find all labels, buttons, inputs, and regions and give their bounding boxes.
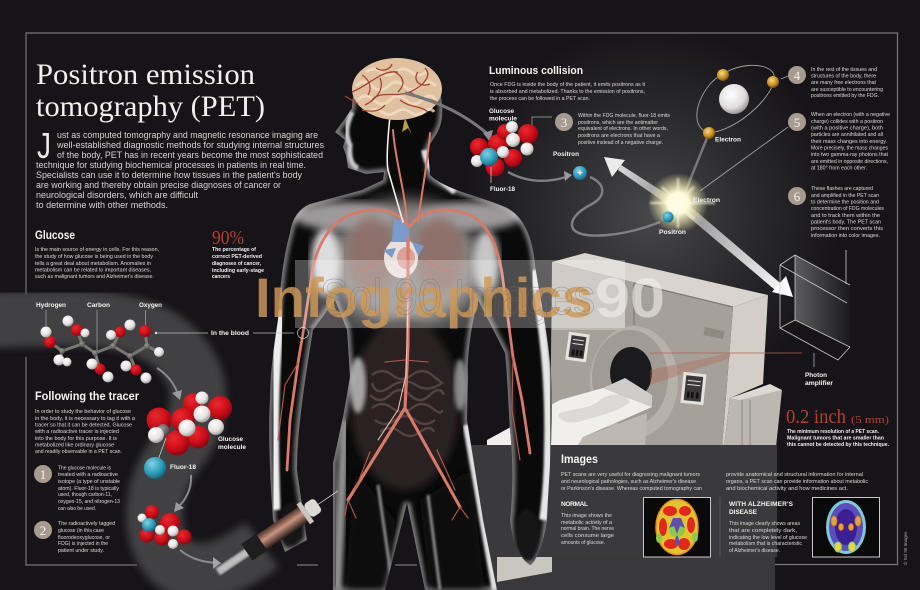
stat: resolution <box>786 406 889 448</box>
step 6: patient's body. The PET scan <box>811 220 881 226</box>
step 5: their mass changes into energy. <box>811 139 887 145</box>
arm highlights <box>274 310 281 510</box>
intro text with drop cap <box>36 125 324 211</box>
luminous collision section: Luminous collision <box>489 65 583 77</box>
step 4: In the rest of the tissues and <box>811 67 877 73</box>
following the tracer section: into the body for this purpose. It is <box>35 436 117 442</box>
step 1: atom). Fluor-18 is typically <box>58 486 119 492</box>
following the tracer section: and readily observable in a PET scan. <box>35 449 122 455</box>
stat: resolution: Malignant tumors that are smaller than <box>787 436 885 442</box>
label: glucose molecule upper: Glucose <box>489 108 515 115</box>
step 3: Within the FDG molecule, fluor-18 emits <box>578 113 670 119</box>
step 3: positive instead of a negative charge. <box>578 140 663 146</box>
background glow behind collision diagram <box>440 34 897 414</box>
luminous collision section: Once FDG is inside the body of the patient, it emits positrons as it <box>490 82 645 88</box>
orbit atom: Electron <box>715 136 741 144</box>
normal brain caption <box>561 501 614 546</box>
step 6: information into color images. <box>811 233 880 239</box>
intro text with drop cap: are working and thereby obtain precise diagnoses of cancer or <box>36 180 282 191</box>
abdomen dark region <box>351 320 459 490</box>
step 6: and to track them within the <box>811 213 880 219</box>
stat: 90 percent: cancers <box>212 274 230 280</box>
title <box>36 58 265 123</box>
label: in the blood <box>155 328 308 338</box>
brainstem marker <box>402 118 412 135</box>
step 2: patient under study. <box>58 548 104 554</box>
control panel right <box>680 372 707 405</box>
step 5 <box>788 112 890 172</box>
gantry ring <box>590 326 730 438</box>
step 4: are many free electrons that <box>811 80 876 86</box>
step 5: 5 <box>794 115 800 130</box>
alzheimer's caption: that are completely dark, <box>729 528 798 534</box>
following the tracer section: with a radioactive tracer is injected <box>34 429 119 435</box>
glucose section <box>35 230 159 280</box>
step 4: structures of the body, there <box>811 74 876 80</box>
arrow: fluor-18 to tagged molecule <box>174 475 191 512</box>
step 1: can also be used. <box>58 506 96 512</box>
step 5: are emitted in opposite directions, <box>811 159 888 165</box>
neck highlight <box>424 150 455 192</box>
alzheimer's caption: metabolism that is characteristic <box>729 541 802 547</box>
arteries <box>278 100 530 520</box>
step 6: to determine the position and <box>811 200 879 206</box>
positron and path: + <box>577 168 583 178</box>
scanner side cabinet <box>724 384 782 447</box>
intro text with drop cap: to determine with other methods. <box>36 200 168 211</box>
step 3: equivalent of electrons. In other words, <box>578 126 668 132</box>
following the tracer section: metabolized like ordinary glucose <box>35 442 114 448</box>
stat: 90 percent: 90% <box>212 227 244 249</box>
alzheimer's brain scan image <box>812 498 880 557</box>
luminous collision section <box>489 65 645 102</box>
photon amplifier box <box>650 250 850 387</box>
step 5: at 180° from each other. <box>811 166 867 172</box>
brain <box>345 58 442 135</box>
scanner side face <box>722 295 768 447</box>
step 1: oxygen-15, and nitrogen-13 <box>58 499 120 505</box>
stat: 90 percent <box>212 227 264 280</box>
images section text <box>561 452 868 492</box>
glucose section: Is the main source of energy in cells. For this reason, <box>35 247 159 253</box>
images section text: organs, a PET scan can provide information about metabolic <box>726 479 868 485</box>
scanner base highlight <box>497 555 552 582</box>
stat: resolution: (5 mm) <box>851 414 889 426</box>
normal brain caption: This image shows the <box>561 513 612 519</box>
normal brain scan image <box>644 498 710 557</box>
control panel left <box>565 332 590 362</box>
divider between brain scans <box>720 497 721 557</box>
step 1 <box>34 465 120 512</box>
molecule atom labels <box>36 302 162 309</box>
intro text with drop cap: J <box>37 125 51 166</box>
label: glucose molecule: molecule <box>218 444 247 451</box>
following the tracer section: In order to study the behavior of glucose <box>35 409 131 415</box>
following the tracer section: Following the tracer <box>35 391 139 403</box>
intro text with drop cap: well-established diagnostic methods for studying internal structures <box>56 140 324 151</box>
scanner top face <box>552 253 768 307</box>
fluor-18 atom: Fluor-18 <box>170 464 197 471</box>
step 2: fluorodeoxyglucose, or <box>58 535 110 541</box>
PET scanner <box>470 253 782 590</box>
tagged molecule <box>138 505 192 549</box>
following the tracer section: in the body, it is necessary to tag it with a <box>35 416 135 422</box>
luminous collision section: the process can be followed in a PET scan. <box>490 96 590 102</box>
step 5: charge) collides with a positron <box>811 119 883 125</box>
step 1: The glucose molecule is <box>58 466 111 472</box>
fdg molecule upper: Fluor-18 <box>490 186 516 193</box>
watermark: Sol 90 Images <box>320 269 595 325</box>
glucose section: Glucose <box>35 230 75 242</box>
step 6: 6 <box>794 189 801 204</box>
step 2 <box>34 521 115 554</box>
molecule atom labels: Carbon <box>87 302 110 309</box>
flash collision: Positron <box>659 229 686 236</box>
molecule atom labels: Oxygen <box>139 302 162 309</box>
scanner door line <box>634 283 733 325</box>
images section text: Images <box>561 452 598 466</box>
step 5: (with a positive charge), both <box>811 126 883 132</box>
arrow: chain to glucose molecule <box>157 368 182 400</box>
images section text: and neurological pathologies, such as Alzheimer's disease <box>561 479 696 485</box>
label: glucose molecule <box>218 436 247 451</box>
heart <box>383 219 424 278</box>
arrow: tagged molecule to syringe <box>180 550 221 569</box>
arrow: brain to molecule <box>405 93 493 142</box>
watermark: Infographics <box>255 266 593 329</box>
following the tracer section <box>34 391 139 455</box>
flash collision <box>648 173 720 236</box>
flash collision: Electron <box>693 197 720 204</box>
luminous collision section: is absorbed and metabolized. Thanks to the emission of positrons, <box>490 89 645 95</box>
step 6: These flashes are captured <box>811 186 873 192</box>
step 2: The radioactively tagged <box>58 521 115 527</box>
step 1: treated with a radioactive <box>58 472 118 478</box>
step 4: positrons emitted by the FDG. <box>811 93 879 99</box>
stat: resolution: 0.2 inch <box>786 406 846 428</box>
label: glucose molecule: Glucose <box>218 436 244 443</box>
title: Positron emission <box>36 58 255 91</box>
stat: resolution: The minimum resolution of a PET scan. <box>787 429 879 435</box>
stat: 90 percent: correct PET-derived <box>212 254 263 260</box>
step 1: isotope (a type of unstable <box>58 479 120 485</box>
intestines <box>370 371 444 436</box>
copyright note: © Sol 90 Images <box>902 531 908 565</box>
label: glucose molecule upper: molecule <box>489 116 518 122</box>
step 5: particles are annihilated and all <box>811 132 883 138</box>
images section text: or Parkinson's disease. Whereas computed tomography can <box>561 486 702 492</box>
stat: 90 percent: diagnoses of cancer, <box>212 261 261 267</box>
dark legs <box>345 470 485 590</box>
stat: 90 percent: The percentage of <box>212 247 256 253</box>
label: glucose molecule upper <box>489 108 518 122</box>
alzheimer's caption: indicating the low level of glucose <box>729 535 807 541</box>
step 3: positrons, which are the antimatter <box>578 120 658 126</box>
stat: resolution: this cannot be detected by this technique. <box>787 442 889 448</box>
glucose section: such as malignant tumors and Alzheimer's disease. <box>35 274 154 280</box>
fluor-18 atom <box>144 438 197 479</box>
large arrow from flash <box>604 157 676 206</box>
photon beam arrow <box>678 200 793 297</box>
step 1: used, though carbon-11, <box>58 492 112 498</box>
intro text with drop cap: of the body, PET has in recent years become the most sophisticated <box>57 150 323 161</box>
positron and path <box>508 151 660 236</box>
step 6: and amplified in the PET scan <box>811 193 879 199</box>
step 1: 1 <box>40 467 46 482</box>
step 3 <box>555 113 670 146</box>
intro text with drop cap: neurological disorders, which are difficult <box>36 190 198 201</box>
step 5: into two gamma-ray photons that <box>811 152 888 158</box>
syringe <box>211 481 345 582</box>
step 3: 3 <box>561 115 567 130</box>
leg highlights <box>466 425 495 590</box>
images section text: provide anatomical and structural information for internal <box>726 472 863 478</box>
step 2: FDG) is injected in the <box>58 541 108 547</box>
step 6 <box>788 186 884 239</box>
chest shading <box>329 200 481 324</box>
tracer path band <box>0 318 262 572</box>
scanner front face <box>550 262 733 447</box>
images section text: and biochemical activity and how medicines act. <box>726 486 848 492</box>
step 4: 4 <box>794 68 801 83</box>
lungs <box>347 217 464 293</box>
step 4: are susceptible to encountering <box>811 87 883 93</box>
following the tracer section: tracer so that it can be detected. Glucose <box>35 422 132 428</box>
normal brain caption: NORMAL <box>561 501 588 508</box>
label: in the blood: In the blood <box>211 330 249 337</box>
intro text with drop cap: ust as computed tomography and magnetic resonance imaging are <box>57 130 318 141</box>
step 2: glucose (in this case <box>58 528 104 534</box>
normal brain caption: normal brain. The nerve <box>561 526 614 532</box>
normal brain caption: amounts of glucose. <box>561 540 605 546</box>
step 2: 2 <box>40 523 46 538</box>
alzheimer's caption: WITH ALZHEIMER'S <box>729 501 794 508</box>
normal brain caption: metabolic activity of a <box>561 520 612 526</box>
photon amplifier box: Photon <box>805 372 827 379</box>
hands dark <box>278 503 304 547</box>
scanner floor <box>470 557 775 590</box>
step 6: processor then converts this <box>811 226 883 232</box>
orbit atom <box>684 65 788 195</box>
glucose molecule large <box>146 392 232 456</box>
photon amplifier box: amplifier <box>805 380 834 387</box>
molecule atom labels: Hydrogen <box>36 302 66 309</box>
panel: images background <box>470 445 777 557</box>
glucose section: the study of how glucose is being used in the body <box>35 254 153 260</box>
patient bed <box>487 378 652 447</box>
step 3: positrons are electrons that have a <box>578 133 660 139</box>
step 6: concentration of FDG molecules <box>811 206 884 212</box>
intro text with drop cap: Specialists can use it to determine how tissues in the patient's body <box>36 170 302 181</box>
alzheimer's caption: This image clearly shows areas <box>729 521 800 527</box>
fdg molecule upper <box>470 117 552 193</box>
step 4 <box>788 66 883 99</box>
face highlights <box>347 112 358 168</box>
alzheimer's caption: of Alzheimer's disease. <box>729 548 780 554</box>
alzheimer's caption <box>729 501 807 554</box>
glucose section: metabolism can be related to important diseases, <box>35 268 151 274</box>
rim light <box>269 58 552 590</box>
human body silhouette <box>269 58 552 590</box>
alzheimer's caption: DISEASE <box>729 509 758 516</box>
normal brain caption: cells consume large <box>561 533 614 539</box>
stat: 90 percent: including early-stage <box>212 268 264 274</box>
title: tomography (PET) <box>36 90 265 123</box>
positron and path: Positron <box>553 151 579 158</box>
step 5: More precisely, the mass changes <box>811 146 888 152</box>
glucose section: tells a great deal about metabolism. Anomalies in <box>35 261 151 267</box>
intro text with drop cap: technique for studying biochemical processes in patients in real time. <box>36 160 306 171</box>
step 5: When an electron (with a negative <box>811 112 890 118</box>
watermark: 90 <box>595 266 665 329</box>
glucose chain molecule <box>40 310 164 384</box>
images section text: PET scans are very useful for diagnosing malignant tumors <box>561 472 700 478</box>
